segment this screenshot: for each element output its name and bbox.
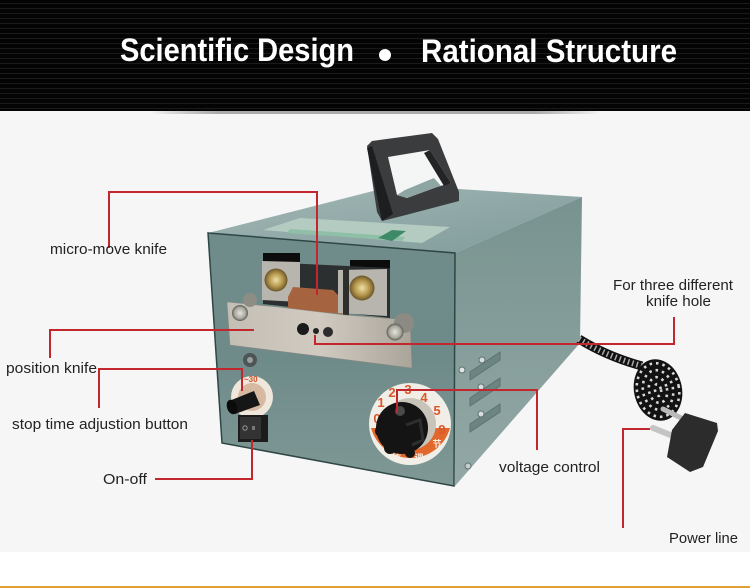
label: position knife: position knife: [6, 360, 97, 377]
title: Rational Structure: [421, 33, 677, 69]
power cable: [579, 339, 642, 366]
label: voltage control: voltage control: [499, 459, 600, 476]
timer dial: [225, 375, 273, 418]
callout labels: [6, 241, 738, 547]
label: three knife holes: For three different: [613, 277, 734, 294]
handle: [367, 133, 459, 221]
label: power line: Power line: [669, 530, 738, 547]
voltage dial: 4: [420, 390, 428, 405]
right terminal: [338, 269, 387, 316]
left terminal: [262, 253, 390, 318]
voltage dial: 调: [414, 452, 424, 463]
side vents: [459, 352, 500, 469]
callout lines: [50, 192, 674, 528]
coiled cord: [628, 355, 688, 425]
title: [120, 32, 677, 69]
top sticker: [263, 218, 450, 243]
copper knife: [288, 287, 344, 314]
case front: [208, 233, 455, 486]
rocker switch: [238, 415, 268, 442]
voltage dial: 9: [438, 422, 446, 437]
timer dial: ~30: [244, 375, 258, 384]
label: three knife holes: knife hole: [646, 293, 711, 310]
label: micro-move knife: micro-move knife: [50, 241, 167, 258]
bottom gold rule: [0, 586, 750, 588]
label: on-off: On-off: [103, 471, 148, 488]
title: Scientific Design: [120, 32, 354, 68]
machine illustration: [208, 133, 718, 486]
voltage dial: 3: [404, 382, 412, 397]
voltage dial: 1: [377, 395, 385, 410]
photo background panel: [0, 111, 750, 552]
voltage dial: 5: [433, 403, 441, 418]
plate holes and screws: [232, 293, 414, 367]
label: three knife holes: [613, 277, 734, 310]
case top: [208, 185, 582, 253]
voltage dial: 2: [388, 385, 396, 400]
case side: [455, 197, 582, 486]
header band: [0, 0, 750, 114]
plug: [653, 409, 718, 472]
voltage dial: 节: [432, 438, 442, 449]
voltage dial: 压: [392, 451, 402, 461]
voltage knob: [375, 402, 428, 458]
label: stop time adjustion button: stop time adjustion button: [12, 416, 188, 433]
steel plate: [227, 302, 412, 368]
voltage dial: [369, 382, 451, 465]
voltage dial: 0: [373, 411, 381, 426]
